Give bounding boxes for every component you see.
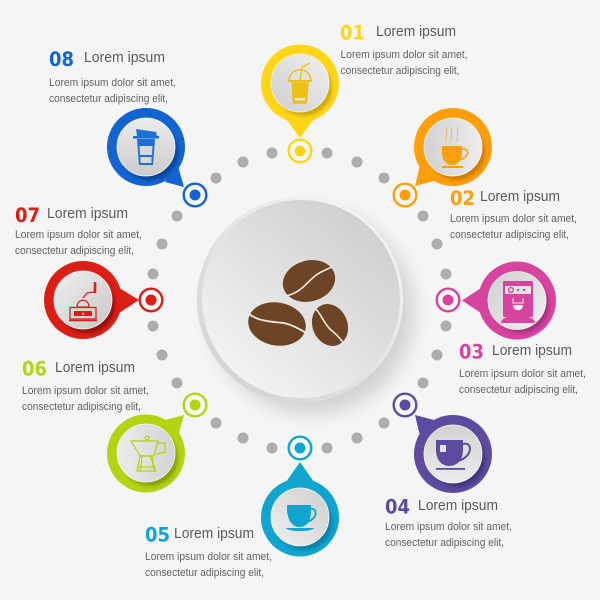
text block 03 — [459, 340, 586, 396]
text block 08 — [49, 48, 176, 105]
icon: espresso machine — [501, 281, 535, 323]
text block 07: Lorem ipsum — [47, 205, 128, 222]
target marker — [437, 289, 459, 311]
text block 02: 02 — [450, 187, 475, 210]
text block 07: consectetur adipiscing elit, — [15, 245, 134, 257]
text block 08: Lorem ipsum — [84, 49, 165, 66]
dotted ring connectors — [148, 148, 452, 454]
text block 02: consectetur adipiscing elit, — [450, 229, 569, 241]
icon: coffee grinder — [69, 282, 97, 320]
text block 04 — [385, 496, 512, 549]
target marker — [140, 289, 162, 311]
text block 03: consectetur adipiscing elit, — [459, 384, 578, 396]
central coffee beans disc — [197, 197, 414, 414]
text block 01 — [340, 22, 468, 77]
text block 04: Lorem ipsum — [418, 497, 498, 514]
text block 05: consectetur adipiscing elit, — [145, 567, 264, 579]
text block 07: Lorem ipsum dolor sit amet, — [15, 229, 142, 241]
target marker — [289, 437, 311, 459]
text block 02: Lorem ipsum — [480, 188, 560, 205]
text block 08: Lorem ipsum dolor sit amet, — [49, 77, 176, 89]
text block 06: consectetur adipiscing elit, — [22, 401, 141, 413]
text block 04: Lorem ipsum dolor sit amet, — [385, 521, 512, 533]
target marker — [394, 394, 416, 416]
text block 01: Lorem ipsum dolor sit amet, — [340, 49, 468, 61]
pin 07: red — [44, 261, 162, 339]
pin 02: orange — [394, 108, 492, 206]
text block 03: Lorem ipsum dolor sit amet, — [459, 368, 586, 380]
text block 06 — [22, 358, 149, 413]
text block 08: consectetur adipiscing elit, — [49, 93, 168, 105]
pin 03: magenta — [437, 262, 556, 340]
text block 01: 01 — [340, 22, 365, 44]
text block 06: Lorem ipsum dolor sit amet, — [22, 385, 149, 397]
text block 04: consectetur adipiscing elit, — [385, 537, 504, 549]
icon: moka pot — [131, 436, 165, 471]
text block 07: 07 — [15, 204, 40, 227]
text block 01: Lorem ipsum — [376, 23, 456, 40]
pin 05: cyan — [261, 437, 339, 556]
icon: coffee beans — [245, 254, 354, 351]
text block 06: 06 — [22, 358, 47, 380]
icon: teacup with tag — [436, 440, 470, 470]
pin 04: purple — [394, 394, 492, 493]
pin 01: yellow — [261, 44, 339, 162]
target marker — [184, 184, 206, 206]
text block 06: Lorem ipsum — [55, 359, 135, 376]
icon: paper coffee cup — [133, 129, 159, 165]
text block 03: Lorem ipsum — [492, 342, 572, 359]
text block 05: Lorem ipsum dolor sit amet, — [145, 551, 272, 563]
text block 01: consectetur adipiscing elit, — [340, 65, 460, 77]
text block 05: 05 — [145, 524, 170, 546]
target marker — [184, 394, 206, 416]
text block 02 — [450, 187, 577, 241]
text block 05 — [145, 524, 272, 579]
icon: steaming coffee cup — [442, 127, 468, 168]
text block 04: 04 — [385, 496, 410, 518]
target marker — [289, 140, 311, 162]
text block 07 — [15, 204, 142, 257]
pin 06: lime — [107, 394, 206, 492]
text block 02: Lorem ipsum dolor sit amet, — [450, 213, 577, 225]
icon: cup and saucer — [286, 505, 316, 531]
text block 08: 08 — [49, 48, 74, 71]
target marker — [394, 184, 416, 206]
text block 03: 03 — [459, 340, 484, 364]
text block 05: Lorem ipsum — [174, 525, 254, 542]
pin 08: blue — [107, 108, 206, 206]
icon: takeaway cup with straw — [288, 63, 312, 103]
